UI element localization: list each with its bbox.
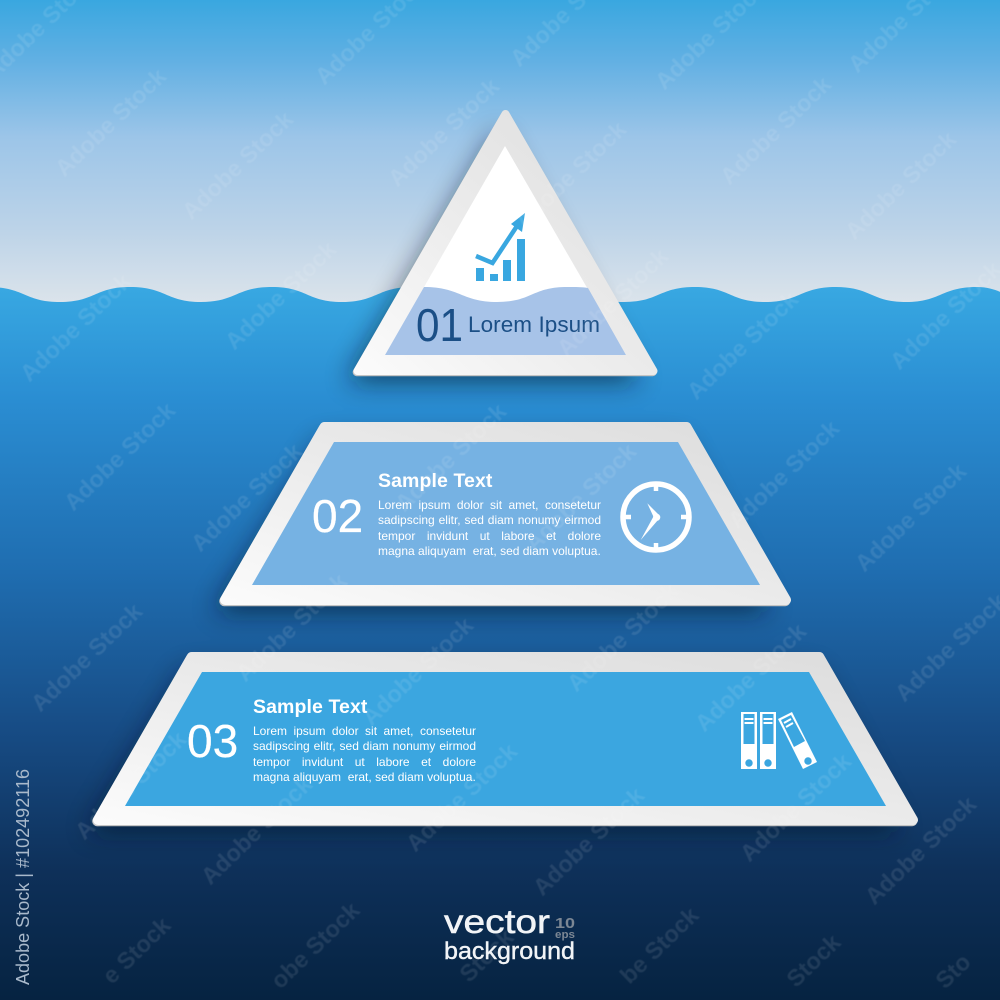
panel 02: middle trapezoid <box>224 427 786 601</box>
body text: panel 02: Lorem ipsum dolor sit amet, consetetur <box>378 498 601 512</box>
trapezoid blue interior <box>125 672 886 806</box>
body text: panel 02: tempor invidunt ut labore et dolore <box>378 529 601 543</box>
watermarks: be Stock <box>615 901 704 989</box>
body text: panel 03: sadipscing elitr, sed diam nonumy eirmod <box>253 739 476 753</box>
watermarks: Adobe Stock <box>723 414 845 533</box>
body text: panel 02 <box>378 498 601 558</box>
watermarks: Adobe Stock <box>26 597 148 716</box>
watermarks: Adobe Stock <box>50 62 172 181</box>
trapezoid frame <box>98 657 913 820</box>
trapezoid edge <box>97 658 912 821</box>
sky background <box>0 0 1000 305</box>
sea with wavy surface <box>0 287 1000 1000</box>
logo: vector background: 10 <box>555 915 575 932</box>
watermarks: Adobe Stock <box>860 790 982 909</box>
watermarks: Adobe Stock <box>562 577 684 696</box>
watermarks: obe Stock <box>266 896 365 994</box>
body text: panel 02: sadipscing elitr, sed diam nonumy eirmod <box>378 513 601 527</box>
watermarks: Adobe Stock <box>59 396 181 515</box>
water inside triangle <box>385 287 626 355</box>
watermarks: Adobe Stock <box>70 725 192 844</box>
logo: vector background: eps <box>555 929 575 941</box>
icon: rising chart <box>476 213 525 281</box>
watermarks: Adobe Stock <box>220 235 342 354</box>
number 01: 01 <box>416 299 463 351</box>
trapezoid blue interior <box>252 442 760 585</box>
watermarks: Adobe Stock <box>186 437 308 556</box>
body text: panel 03: tempor invidunt ut labore et dolore <box>253 755 476 769</box>
triangle edge <box>357 115 653 372</box>
logo: vector background <box>444 903 575 965</box>
watermarks: Adobe Stock <box>552 242 674 361</box>
icon: binders <box>741 712 817 769</box>
watermarks: Adobe Stock <box>735 747 857 866</box>
watermarks: Adobe Stock <box>840 125 962 244</box>
watermarks: Adobe Stock <box>357 611 479 730</box>
watermarks: Adobe Stock <box>390 397 512 516</box>
watermarks: Adobe Stock <box>177 105 299 224</box>
logo: vector background: background <box>444 938 575 965</box>
watermarks: Adobe Stock <box>196 770 318 889</box>
trapezoid frame <box>225 427 786 600</box>
trapezoid edge <box>224 428 785 601</box>
number 03: 03 <box>187 715 238 767</box>
label: Lorem Ipsum: Lorem Ipsum <box>468 312 600 337</box>
panel 03: bottom trapezoid <box>97 657 913 821</box>
watermarks: Adobe Stock <box>383 72 505 191</box>
white triangle interior <box>385 146 626 355</box>
watermarks: Adobe Stock <box>528 781 650 900</box>
watermarks: Adobe Stock <box>401 737 523 856</box>
watermarks: Adobe Stock <box>690 617 812 736</box>
heading: panel 02: Sample Text <box>378 470 493 492</box>
body text: panel 03: magna aliquyam erat, sed diam voluptua. <box>253 770 476 784</box>
number 02: 02 <box>312 490 363 542</box>
watermarks: Adobe Stock <box>682 285 804 404</box>
watermarks: Adobe Stock <box>715 70 837 189</box>
body text: panel 03 <box>253 724 476 784</box>
panel 01: top triangle <box>357 114 654 372</box>
stock id, vertical: Adobe Stock | #102492116 <box>13 769 33 985</box>
watermarks: Adobe Stock <box>520 437 642 556</box>
watermarks: Adobe Stock <box>510 115 632 234</box>
watermarks: Adobe Stock <box>850 457 972 576</box>
logo: vector background: vector <box>444 903 550 940</box>
body text: panel 02: magna aliquyam erat, sed diam voluptua. <box>378 544 601 558</box>
watermarks: Adobe Stock <box>231 567 353 686</box>
watermarks: Stock <box>454 923 519 987</box>
body text: panel 03: Lorem ipsum dolor sit amet, consetetur <box>253 724 476 738</box>
panel shadows <box>88 130 900 832</box>
watermarks: e Stock <box>97 911 176 989</box>
heading: panel 03: Sample Text <box>253 696 368 718</box>
watermarks: Sto <box>930 949 976 994</box>
triangle frame <box>358 114 654 371</box>
watermarks: Adobe Stock <box>15 267 137 386</box>
watermarks: Stock <box>781 928 846 992</box>
icon: clock <box>623 484 689 550</box>
